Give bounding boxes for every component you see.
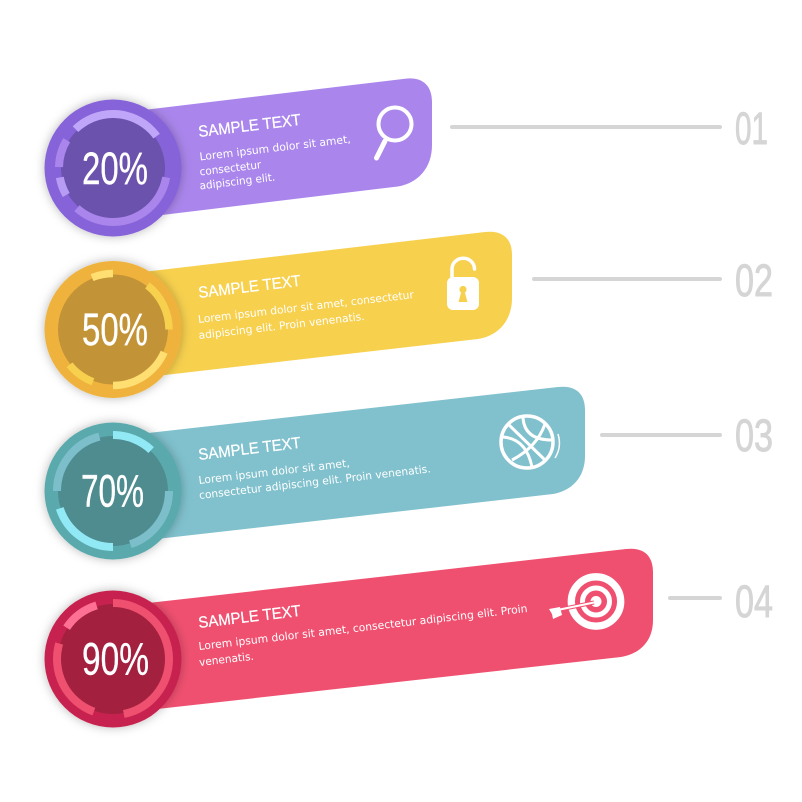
circle badge 70%: 70% [81, 466, 144, 516]
banner 01 [113, 78, 432, 221]
body text 02: adipiscing elit. Proin venenatis. [198, 310, 365, 342]
connector 02 [534, 277, 720, 281]
body text 03: consectetur adipiscing elit. Proin venenatis. [198, 462, 431, 502]
body text 01: adipiscing elit. [199, 171, 276, 192]
body text 01 [199, 133, 351, 192]
circle badge 50% [34, 251, 192, 408]
panel: item 01 purple [37, 78, 768, 244]
circle badge 50%: 50% [82, 304, 148, 355]
icon: open padlock [447, 258, 479, 310]
heading 04: SAMPLE TEXT [197, 603, 302, 632]
heading 03: SAMPLE TEXT [197, 435, 302, 464]
circle badge 70% [44, 422, 182, 560]
banner 03 [113, 387, 585, 544]
banner 04 [113, 549, 653, 714]
number 01: 01 [735, 103, 768, 154]
circle badge 90% [35, 581, 191, 737]
panel: item 03 teal [44, 387, 773, 560]
number 02: 02 [735, 255, 773, 306]
connector 01 [452, 125, 720, 129]
icon: target with arrow [549, 577, 621, 626]
banner 02 [113, 232, 512, 381]
number 04: 04 [735, 576, 773, 627]
circle badge 20% [37, 92, 189, 244]
heading 01: SAMPLE TEXT [197, 112, 302, 141]
body text 04: Lorem ipsum dolor sit amet, consectetur adipiscing elit. Proin [198, 602, 528, 653]
body text 02 [197, 288, 415, 342]
body text 04: venenatis. [198, 650, 254, 669]
connector 03 [602, 433, 720, 437]
icon: basketball [501, 416, 559, 468]
number 03: 03 [735, 410, 773, 461]
circle badge 90%: 90% [82, 634, 149, 684]
circle badge 20%: 20% [82, 143, 148, 194]
connector 04 [670, 596, 720, 600]
icon: magnifier [376, 108, 412, 158]
heading 02: SAMPLE TEXT [197, 273, 302, 302]
body text 02: Lorem ipsum dolor sit amet, consectetur [197, 288, 415, 326]
body text 01: consectetur [199, 158, 262, 178]
panel: item 04 red [35, 549, 773, 737]
body text 03: Lorem ipsum dolor sit amet, [198, 457, 350, 487]
panel: item 02 yellow [34, 232, 773, 408]
body text 01: Lorem ipsum dolor sit amet, [199, 133, 351, 163]
